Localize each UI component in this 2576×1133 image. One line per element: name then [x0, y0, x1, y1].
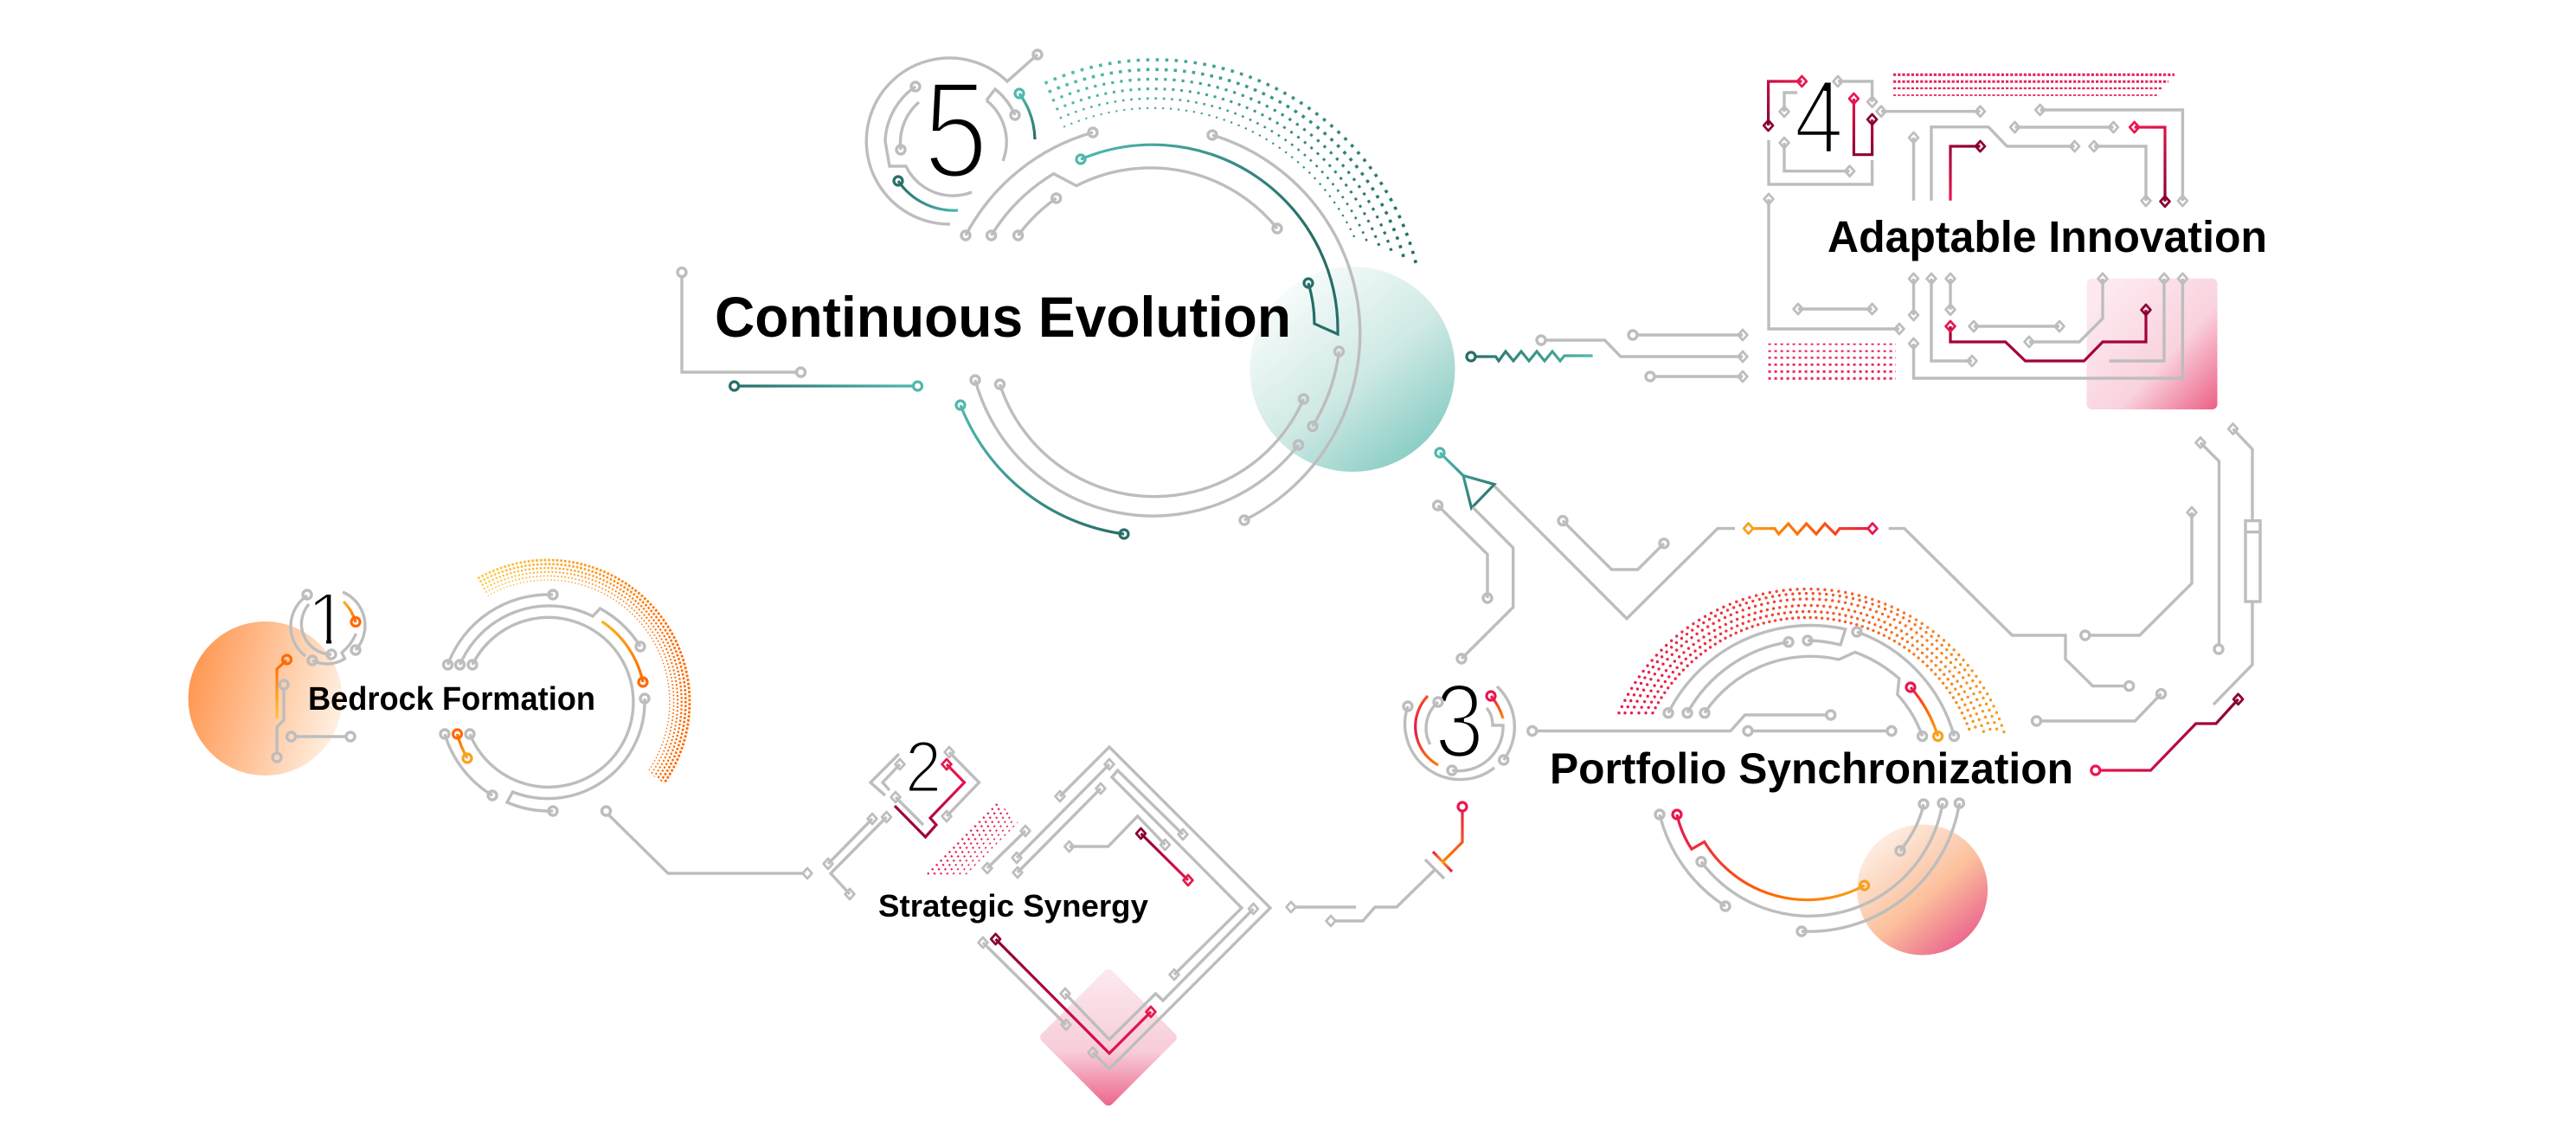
step 4: adaptable innovation circuit [1467, 74, 2267, 409]
step 1: bedrock formation circuit [189, 560, 690, 815]
heading: bedrock formation: Bedrock Formation [308, 681, 595, 718]
numeral ring 5 [866, 50, 1042, 224]
icon: resistor zigzag teal [1467, 351, 1593, 361]
dotted arc 3 [1619, 589, 2004, 732]
teal gradient circle [1249, 267, 1455, 472]
heading: adaptable innovation: Adaptable Innovation [1828, 212, 2267, 261]
top traces [1877, 105, 2187, 207]
big diamond traces [979, 747, 1270, 1069]
icon: orange gradient circle [189, 621, 343, 776]
dotted arc 1 [478, 560, 690, 783]
left traces and amplifier [1434, 448, 1735, 663]
left bracket traces [678, 268, 922, 390]
numeral ring 1 [291, 590, 365, 665]
circuit traces inside circle [273, 655, 355, 762]
connector traces to step 5 [1537, 330, 1747, 382]
dotted band 2 [928, 802, 1018, 874]
dotted block 4 [1769, 344, 1896, 378]
numeral frame 4 [1763, 76, 1877, 184]
connector from step 1 to step 2 [602, 807, 812, 879]
dotted band top 4 [1893, 74, 2175, 95]
heading: portfolio synchronization: Portfolio Synchronization [1550, 744, 2073, 793]
numeral 5: 5 [923, 53, 988, 208]
numeral ring 2 [870, 747, 980, 837]
step 3: portfolio synchronization circuit [1404, 424, 2260, 956]
big ring 5 [956, 128, 1360, 538]
numeral 2: 2 [905, 726, 941, 808]
numeral 4: 4 [1795, 58, 1843, 176]
right traces [1528, 424, 2260, 775]
lower arcs 3 [1655, 799, 1963, 936]
connector with capacitor [1287, 802, 1467, 926]
heading: continuous evolution: Continuous Evolution [715, 285, 1291, 349]
pink gradient rectangle [2087, 279, 2217, 409]
numeral 3: 3 [1435, 662, 1484, 780]
peach gradient circle [1857, 824, 1988, 956]
step 5: continuous evolution circuit [678, 50, 1455, 538]
upper arcs 3 [1664, 626, 1958, 741]
numeral ring 3 [1404, 686, 1514, 780]
icon: resistor zigzag orange [1744, 524, 1877, 534]
heading: strategic synergy: Strategic Synergy [878, 888, 1148, 924]
bottom traces [1764, 194, 2187, 378]
pink diamond [1038, 967, 1179, 1108]
dotted arc 5 [1045, 60, 1416, 266]
big ring 1 [440, 590, 649, 815]
left traces [824, 812, 891, 899]
numeral 1: 1 [307, 578, 348, 661]
step 2: strategic synergy circuit [824, 747, 1270, 1108]
